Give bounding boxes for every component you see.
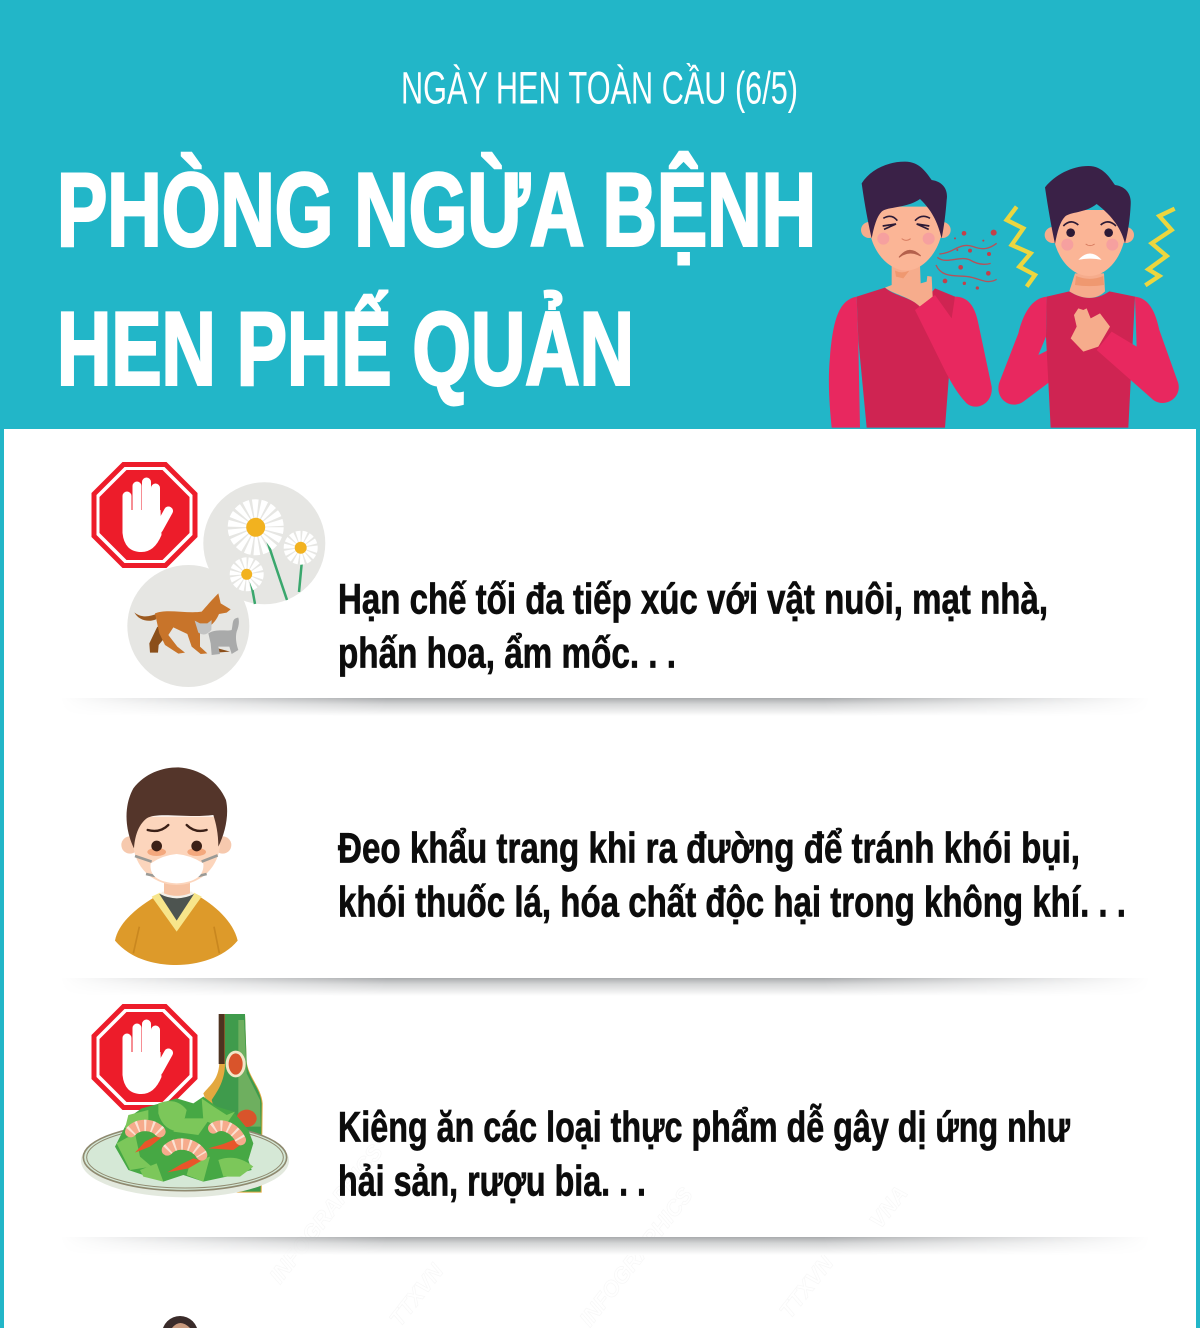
man holding chest [998,166,1179,428]
icon: shrimp salad plate [81,1097,289,1197]
icon: person head cropped at bottom [162,1316,198,1328]
text: limit contact with allergens: phấn hoa, ẩm mốc. . . [338,630,676,678]
watermark: VNA [864,1181,913,1233]
icon: beer bottle [203,1014,263,1193]
illustration: two men with asthma symptoms [829,162,1179,428]
icon: stop hand sign 2 [92,1004,198,1110]
divider 1 [92,698,1118,714]
icon: daisies circle [203,482,325,604]
divider 2 [92,978,1117,994]
main title: HEN PHẾ QUẢN [57,292,634,408]
man coughing [829,162,992,428]
main title [57,152,816,408]
white content panel [4,429,1196,1328]
watermark: TTXVN [774,1250,839,1323]
watermark: INFOGRAPHICS [574,1183,698,1328]
text: avoid allergenic foods [338,1102,1071,1206]
yellow lightning mark right [1145,209,1175,285]
watermark [264,1140,913,1328]
subtitle: global asthma day: NGÀY HEN TOÀN CẦU (6/5) [401,62,798,114]
icon: pets circle [127,565,249,687]
text: limit contact with allergens [338,576,1048,678]
text: wear a mask [338,824,1126,926]
text: avoid allergenic foods: hải sản, rượu bia. . . [338,1158,646,1206]
yellow lightning mark left [1007,207,1035,287]
icon: stop hand sign 1 [92,462,198,568]
shrimps [131,1125,245,1172]
icon: man wearing mask [115,767,238,965]
divider 3 [92,1237,1118,1252]
watermark: INFOGRAPHICS [264,1140,388,1288]
cough particles [936,230,997,290]
lettuce [115,1097,253,1182]
main title: PHÒNG NGỪA BỆNH [57,152,816,268]
